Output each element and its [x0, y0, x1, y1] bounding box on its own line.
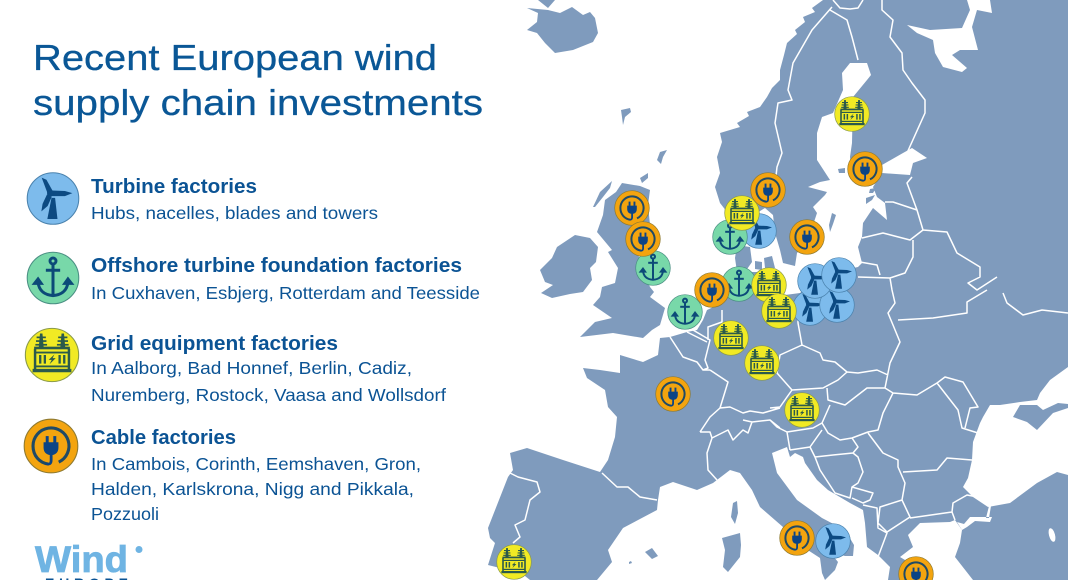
text: grid sites: [91, 358, 446, 405]
text: cable sites: Pozzuoli: [91, 504, 159, 524]
marker: grid Nuremberg: [745, 346, 779, 380]
marker: grid Aalborg: [725, 196, 759, 230]
marker: turbine Poland south-east: [820, 288, 854, 322]
land: islands: [527, 0, 876, 572]
text: cable sites: In Cambois, Corinth, Eemshaven, Gron,: [91, 454, 421, 474]
marker: anchor Teesside: [636, 251, 670, 285]
marker: grid Berlin: [762, 294, 796, 328]
legend: turbine factories: [27, 173, 378, 224]
marker: grid Bad Honnef: [714, 321, 748, 355]
land: mainland Europe: [488, 0, 1068, 580]
marker: turbine Poland north-west: [798, 264, 832, 298]
marker: cable Nigg: [615, 191, 649, 225]
icon: wind turbine: [27, 173, 79, 224]
icon: anchor: [27, 252, 79, 304]
marker: cable Pikkala: [848, 152, 882, 186]
marker: anchor Rotterdam: [668, 295, 702, 329]
legend: offshore foundations: [27, 252, 480, 304]
marker: turbine Italy: [816, 524, 850, 558]
legend: cable factories: [24, 419, 421, 524]
marker: turbine Poland north-east: [822, 258, 856, 292]
map markers: [497, 97, 933, 580]
legend: grid equipment: [25, 328, 446, 405]
marker: cable France: [656, 377, 690, 411]
heading: turbine factories: Turbine factories: [91, 176, 257, 198]
sea: Black Sea: [963, 367, 1068, 507]
marker: cable Halden: [751, 173, 785, 207]
text: cable sites: [91, 454, 421, 524]
national borders: [510, 0, 1068, 557]
marker: cable Corinth: [899, 557, 933, 580]
marker: cable Karlskrona: [790, 220, 824, 254]
marker: cable Cambois: [626, 222, 660, 256]
text: foundation sites: In Cuxhaven, Esbjerg, Rotterdam and Teesside: [91, 283, 480, 303]
marker: anchor Cuxhaven: [722, 267, 756, 301]
title: [33, 37, 483, 123]
text: cable sites: Halden, Karlskrona, Nigg and Pikkala,: [91, 479, 414, 499]
text: hubs: Hubs, nacelles, blades and towers: [91, 203, 378, 223]
title: Recent European wind: [33, 37, 437, 78]
icon: transformer: [25, 328, 79, 382]
heading: grid equipment: Grid equipment factories: [91, 333, 338, 355]
text: grid sites: In Aalborg, Bad Honnef, Berlin, Cadiz,: [91, 358, 412, 378]
heading: cable factories: Cable factories: [91, 427, 236, 449]
marker: cable Pozzuoli: [780, 521, 814, 555]
lake: Tuz: [1047, 527, 1057, 543]
marker: grid Wollsdorf: [785, 393, 819, 427]
heading: offshore foundations: Offshore turbine foundation factories: [91, 255, 462, 277]
marker: cable Eemshaven: [695, 273, 729, 307]
icon: plug: [24, 419, 78, 473]
marker: anchor Esbjerg: [713, 220, 747, 254]
title: supply chain investments: [33, 82, 483, 123]
logo: WindEurope: Wind: [35, 539, 128, 580]
sea: Marmara: [957, 506, 992, 530]
land: Crimea: [1013, 403, 1068, 430]
marker: grid Rostock: [752, 268, 786, 302]
map of Europe: [488, 0, 1068, 580]
marker: grid Cadiz: [497, 545, 531, 579]
marker: turbine Poland south-west: [793, 291, 827, 325]
text: grid sites: Nuremberg, Rostock, Vaasa and Wollsdorf: [91, 385, 446, 405]
marker: grid Vaasa: [835, 97, 869, 131]
marker: turbine factory Denmark: [742, 214, 776, 248]
